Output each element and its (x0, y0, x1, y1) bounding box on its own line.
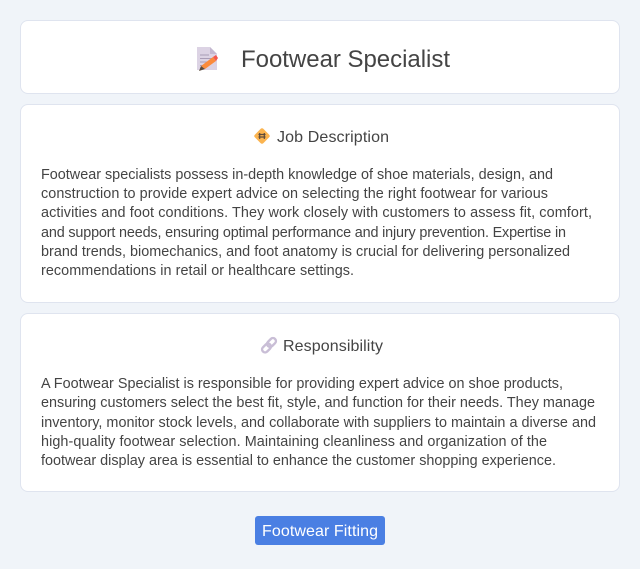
button: footwear fitting (255, 516, 385, 545)
text block: job description body: construction to provide expert advice on selecting the right footwear for various (41, 186, 548, 202)
text block: job description body (41, 167, 592, 279)
panel: responsibility (20, 313, 620, 492)
text block: job description body: activities and foot conditions. They work closely with customers to assess fit, comfort, (41, 205, 592, 221)
text block: responsibility body: high-quality footwear selection. Maintaining cleanliness and organization of the (41, 434, 547, 450)
panel: job description (20, 104, 620, 303)
button: footwear fitting: Footwear Fitting (262, 523, 378, 540)
text block: responsibility body: footwear display area is essential to enhance the customer shopping experience. (41, 453, 556, 469)
icon: document with pencil (197, 47, 218, 71)
text block: job description body: brand trends, biomechanics, and foot anatomy is crucial for delivering personalized (41, 244, 570, 260)
text block: responsibility body (41, 376, 596, 469)
title: Footwear Specialist (241, 46, 450, 73)
icon: amber diamond sign (254, 128, 270, 144)
heading: responsibility: Responsibility (283, 338, 383, 355)
text block: responsibility body: ensuring customers select the best fit, style, and function for their needs. They manage (41, 395, 595, 411)
text block: job description body: recommendations in retail or healthcare settings. (41, 263, 354, 279)
text block: responsibility body: inventory, monitor stock levels, and collaborate with suppliers to maintain a diverse and (41, 415, 596, 431)
heading: job description: Job Description (277, 129, 389, 146)
text block: responsibility body: A Footwear Specialist is responsible for providing expert advice on shoe products, (41, 376, 563, 392)
icon: chain link (261, 337, 277, 354)
text block: job description body: Footwear specialists possess in-depth knowledge of shoe materials, design, and (41, 167, 553, 183)
text block: job description body: and support needs, ensuring optimal performance and injury prevention. Expertise in (41, 225, 566, 241)
panel: title card (20, 20, 620, 94)
